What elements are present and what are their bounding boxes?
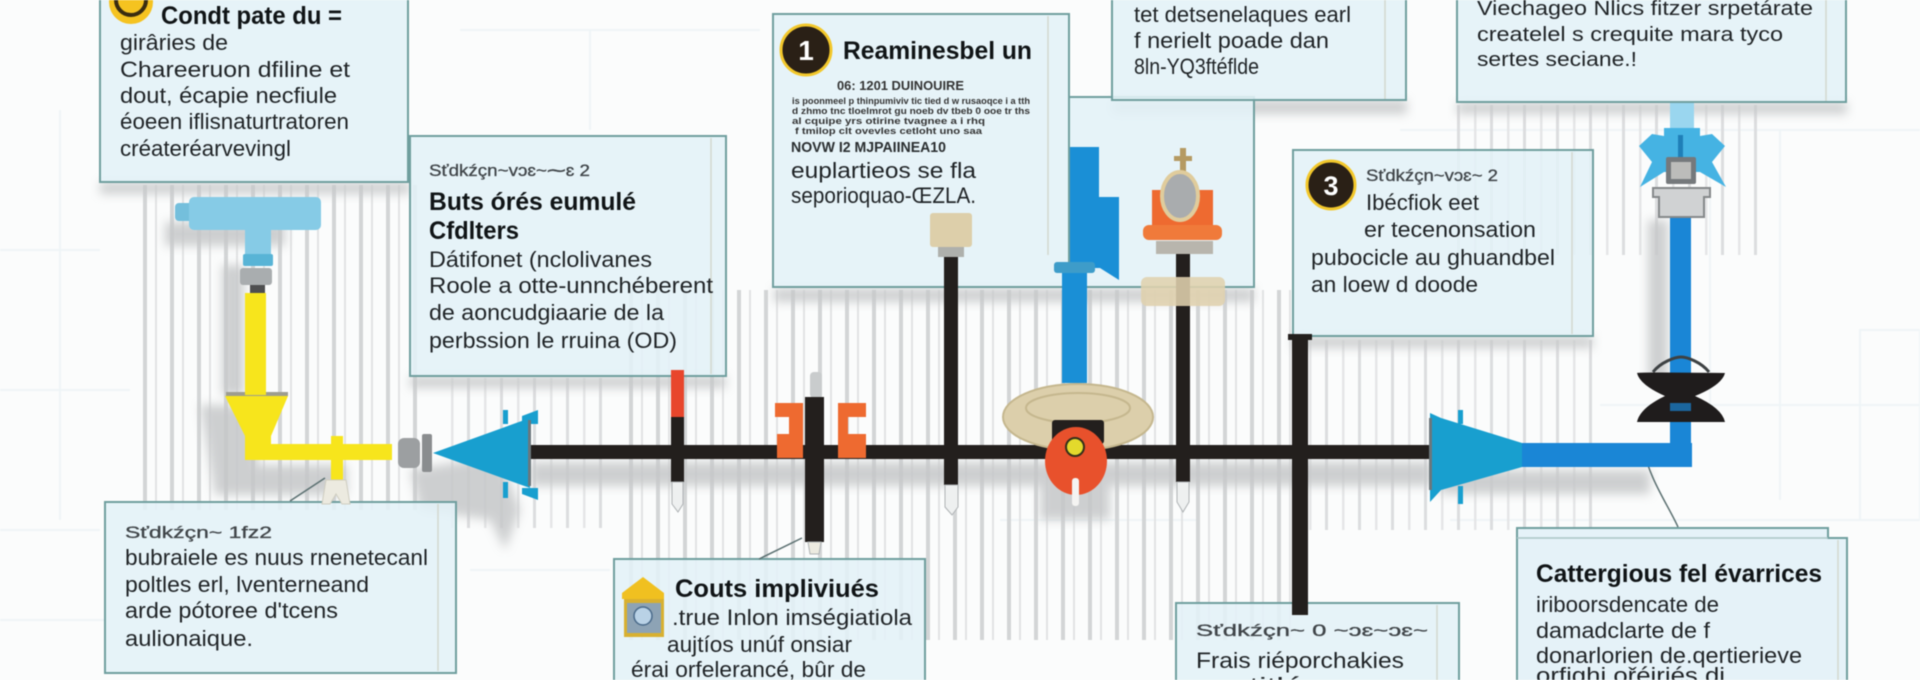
panel: step 3 <box>1293 150 1593 336</box>
leader lines <box>290 448 1678 559</box>
sublabel: Sťdkźçn~vɔɛ~ 2 <box>1366 166 1498 185</box>
heading: Buts órés eumulé <box>429 188 636 216</box>
text block: créateréarvevingl <box>120 136 291 161</box>
text block: Dátifonet (nclolivanes <box>429 247 652 272</box>
panel: bottom left <box>105 502 456 673</box>
text block: aujtíos unúf onsiar <box>667 632 852 657</box>
pipe: left light blue tee <box>175 197 321 294</box>
text block: perbssion le rruina (OD) <box>429 328 677 353</box>
text block: Ibécfiok eet <box>1366 190 1479 215</box>
panel: top right <box>1457 0 1846 102</box>
panel: top middle <box>1112 0 1406 100</box>
text block: arde pótoree d'tcens <box>125 598 338 623</box>
text block <box>120 30 350 161</box>
heading: Reaminesbel un <box>843 37 1032 65</box>
text block: createlel s crequite mara tyco <box>1477 24 1783 46</box>
small print <box>792 96 1030 136</box>
text block <box>1536 592 1802 680</box>
text block <box>1477 0 1813 71</box>
text block <box>429 247 713 353</box>
panel: frais <box>1176 603 1459 680</box>
text block: girâries de <box>120 30 228 55</box>
text block: aulionaique. <box>125 626 253 651</box>
sub heading: 06: 1201 DUINOUIRE <box>837 78 964 93</box>
text block: seporioquao-ŒZLA. <box>791 183 976 208</box>
text block: f nerielt poade dan <box>1134 28 1329 53</box>
panel: cond pate <box>100 0 408 182</box>
text block: er tecenonsation <box>1364 217 1536 242</box>
sensor: beige block <box>930 213 972 515</box>
heading: Cfdlters <box>429 217 519 245</box>
valve: orange fitting <box>775 372 866 554</box>
text block <box>125 545 428 651</box>
text block: 8ln-YQ3ftéflde <box>1134 54 1259 79</box>
text block: donarlorien de.qertierieve <box>1536 643 1802 668</box>
text block: de aoncudgiaarie de la <box>429 300 665 325</box>
arrow: left blue cone <box>433 410 538 500</box>
heading: Condt pate du = <box>161 2 342 30</box>
text block <box>1134 2 1351 79</box>
text block: éoeen iflisnaturtratoren <box>120 109 349 134</box>
text block <box>791 158 977 208</box>
pipe: yellow elbow and funnel <box>225 293 392 504</box>
icon: number 1 badge <box>781 25 831 75</box>
panel: top centre-right backing box <box>1069 97 1254 287</box>
small print: al cquipe yrs otirine tvagnee a i rhq <box>792 116 985 126</box>
pipe: main black line <box>531 445 1431 459</box>
small print: d zhmo tnc tloelmrot gu noeb dv tbeb 0 ooe tr ths <box>792 106 1030 116</box>
soft shadows <box>100 100 1847 550</box>
icon: yellow warning badge <box>109 0 153 24</box>
text block: bubraiele es nuus rnenetecanl <box>125 545 428 570</box>
text block: dout, écapie necfiule <box>120 83 337 108</box>
text block: an loew d doode <box>1311 272 1478 297</box>
icon: yellow document <box>622 577 664 637</box>
panel: couts <box>614 559 925 680</box>
text block: euplartieos se fla <box>791 158 977 183</box>
heading: Cattergious fel évarrices <box>1536 560 1822 588</box>
text block <box>1196 648 1404 680</box>
pipe: right blue riser <box>1522 217 1692 467</box>
small print: f tmilop clt ovevles cetloht uno saa <box>795 126 983 136</box>
text block: sertes seciane.! <box>1477 49 1637 71</box>
valve: black spool <box>1637 357 1725 422</box>
panel: catégories <box>1517 528 1847 680</box>
heading <box>429 188 636 245</box>
vertical background lines <box>130 105 1760 640</box>
text block: damadclarte de f <box>1536 618 1711 643</box>
icon: number 1 badge: 1 <box>798 35 814 66</box>
sublabel: Sťdkźçn~vɔɛ~⁓ɛ 2 <box>429 161 590 180</box>
regulator: beige dome and red valve <box>1003 384 1153 506</box>
text block: Chareeruon dfiline et <box>120 57 350 82</box>
text block: Frais riéporchakies <box>1196 648 1404 673</box>
icon: number 3 badge: 3 <box>1323 171 1339 201</box>
text block: tet detsenelaques earl <box>1134 2 1351 27</box>
valve: red stick <box>671 370 684 512</box>
pipe: tall black branch <box>1288 334 1312 615</box>
sublabel: Sťdkźçn~ 1fz2 <box>125 523 272 542</box>
valve: grey coupling <box>398 434 432 472</box>
filter: light blue star <box>1639 103 1726 217</box>
panel: step 1 <box>773 14 1069 287</box>
text block <box>631 605 913 680</box>
icon: number 3 badge <box>1307 161 1355 209</box>
text block: Roole a otte-unnchéberent <box>429 273 713 298</box>
text block: .true Inlon imségiatiola <box>672 605 913 630</box>
text block: iriboorsdencate de <box>1536 592 1719 617</box>
text block <box>1311 190 1555 297</box>
sublabel: Sťdkźçn~ 0 ~ɔɛ~ɔɛ~ <box>1196 621 1428 640</box>
caps line: NOVW I2 MJPAIINEA10 <box>791 139 946 156</box>
arrow: right blue cone <box>1429 410 1522 504</box>
blue panel device <box>1054 147 1119 383</box>
heading: Couts impliviués <box>675 575 879 603</box>
panel: buts <box>410 136 726 376</box>
text block: poltles erl, lventerneand <box>125 572 369 597</box>
text block: pubocicle au ghuandbel <box>1311 245 1555 270</box>
gauge: orange device <box>1141 148 1225 512</box>
small print: is poonmeel p thinpumiviv tic tied d w rusaoqce i a tth <box>792 96 1030 106</box>
